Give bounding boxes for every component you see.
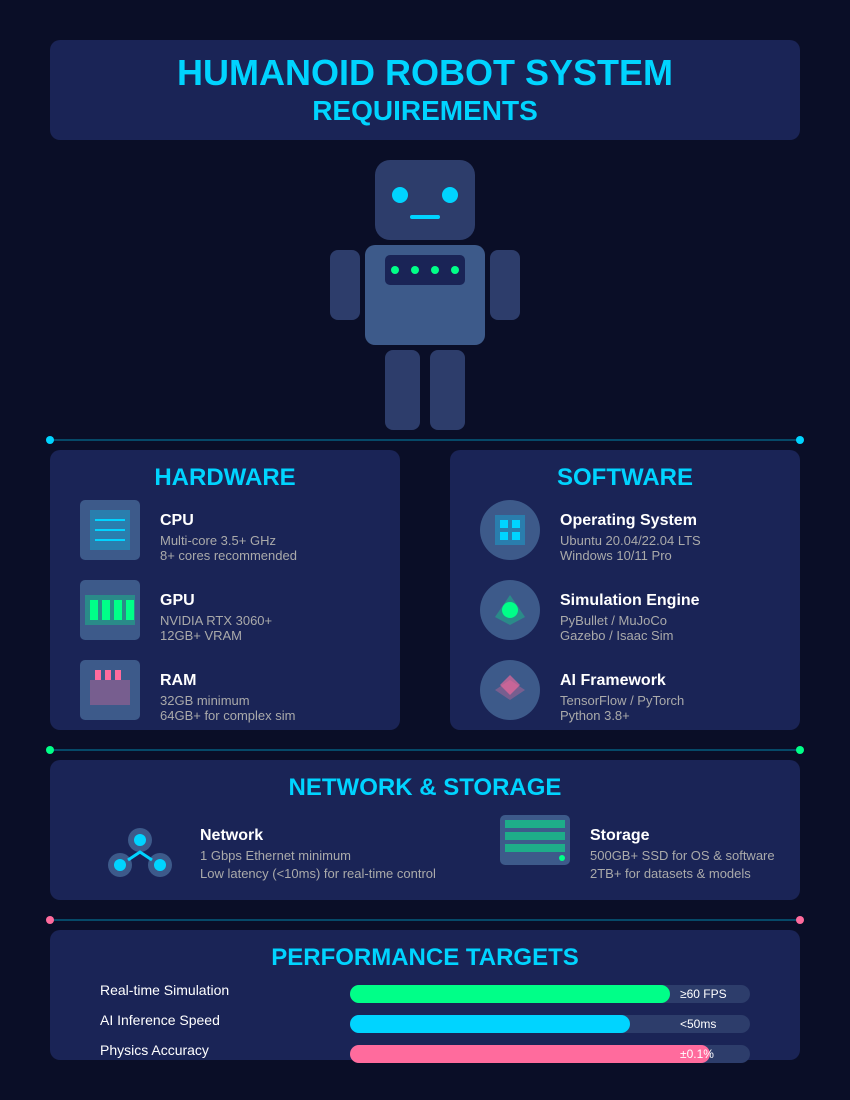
bar: real-time simulation bbox=[100, 982, 750, 1003]
title banner bbox=[50, 40, 800, 140]
storage text bbox=[590, 827, 775, 881]
network text: Low latency (<10ms) for real-time control bbox=[200, 866, 436, 881]
RAM text bbox=[160, 672, 295, 723]
icon: GPU bbox=[80, 580, 140, 640]
CPU text: CPU bbox=[160, 512, 194, 529]
bar: physics accuracy bbox=[100, 1042, 750, 1063]
bar: AI inference speed: AI Inference Speed bbox=[100, 1012, 220, 1028]
bar: real-time simulation: ≥60 FPS bbox=[680, 987, 727, 1001]
AI framework text: TensorFlow / PyTorch bbox=[560, 693, 684, 708]
icon: CPU bbox=[80, 500, 140, 560]
hardware heading: HARDWARE bbox=[154, 464, 296, 491]
GPU text: NVIDIA RTX 3060+ bbox=[160, 613, 272, 628]
CPU text: Multi-core 3.5+ GHz bbox=[160, 533, 276, 548]
icon: simulation engine bbox=[480, 580, 540, 640]
robot head bbox=[375, 160, 475, 240]
network text bbox=[200, 827, 436, 881]
robot illustration bbox=[330, 160, 520, 430]
AI framework text bbox=[560, 672, 684, 723]
performance targets heading: PERFORMANCE TARGETS bbox=[271, 944, 579, 971]
storage text: 2TB+ for datasets & models bbox=[590, 866, 751, 881]
GPU text: GPU bbox=[160, 592, 195, 609]
network text: Network bbox=[200, 827, 263, 844]
GPU text bbox=[160, 592, 272, 643]
CPU text: 8+ cores recommended bbox=[160, 548, 297, 563]
simulation engine text bbox=[560, 592, 700, 643]
panel: hardware bbox=[50, 450, 400, 730]
operating system text: Windows 10/11 Pro bbox=[560, 548, 672, 563]
icon: storage bbox=[500, 815, 570, 865]
RAM text: 64GB+ for complex sim bbox=[160, 708, 295, 723]
simulation engine text: Simulation Engine bbox=[560, 592, 700, 609]
RAM text: 32GB minimum bbox=[160, 693, 250, 708]
robot legs bbox=[385, 350, 465, 430]
GPU text: 12GB+ VRAM bbox=[160, 628, 242, 643]
panel: software bbox=[450, 450, 800, 730]
simulation engine text: Gazebo / Isaac Sim bbox=[560, 628, 673, 643]
RAM text: RAM bbox=[160, 672, 196, 689]
network text: 1 Gbps Ethernet minimum bbox=[200, 848, 351, 863]
operating system text: Ubuntu 20.04/22.04 LTS bbox=[560, 533, 701, 548]
robot arms bbox=[330, 250, 520, 320]
panel: network and storage bbox=[50, 760, 800, 900]
bar: AI inference speed bbox=[100, 1012, 750, 1033]
bar: physics accuracy: Physics Accuracy bbox=[100, 1042, 209, 1058]
subtitle: REQUIREMENTS bbox=[312, 95, 538, 126]
panel: performance targets bbox=[50, 930, 800, 1063]
simulation engine text: PyBullet / MuJoCo bbox=[560, 613, 667, 628]
bar: AI inference speed: <50ms bbox=[680, 1017, 716, 1031]
icon: RAM bbox=[80, 660, 140, 720]
CPU text bbox=[160, 512, 297, 563]
operating system text: Operating System bbox=[560, 512, 697, 529]
icon: AI framework bbox=[480, 660, 540, 720]
storage text: 500GB+ SSD for OS & software bbox=[590, 848, 775, 863]
storage text: Storage bbox=[590, 827, 650, 844]
title: HUMANOID ROBOT SYSTEM bbox=[177, 52, 673, 93]
network and storage heading: NETWORK & STORAGE bbox=[289, 774, 561, 801]
AI framework text: AI Framework bbox=[560, 672, 666, 689]
bar: real-time simulation: Real-time Simulation bbox=[100, 982, 229, 998]
icon: operating system bbox=[480, 500, 540, 560]
AI framework text: Python 3.8+ bbox=[560, 708, 630, 723]
icon: network bbox=[108, 828, 172, 877]
bar: physics accuracy: ±0.1% bbox=[680, 1047, 714, 1061]
software heading: SOFTWARE bbox=[557, 464, 693, 491]
robot torso bbox=[365, 245, 485, 345]
operating system text bbox=[560, 512, 701, 563]
